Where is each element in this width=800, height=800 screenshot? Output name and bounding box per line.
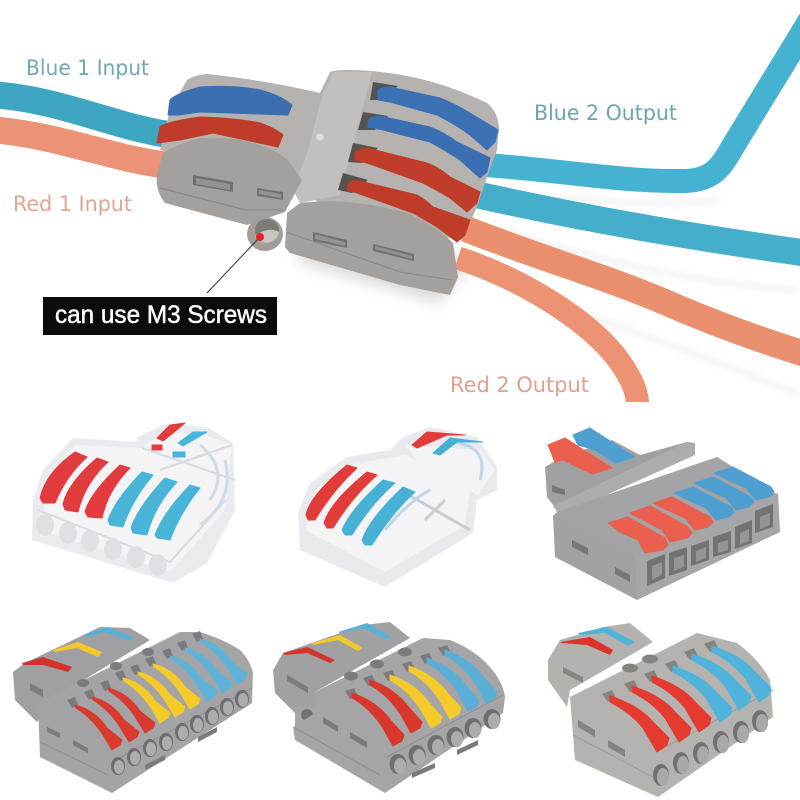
levers red <box>40 423 185 518</box>
label: Red 2 Output: Red 2 Output <box>450 373 589 397</box>
label: Blue 1 Input: Blue 1 Input <box>26 56 149 80</box>
windows and top holes <box>578 654 658 757</box>
back block <box>548 623 653 707</box>
wire: blue 2 output lower <box>478 195 800 253</box>
left block <box>157 138 302 225</box>
connector 2: clear 2-to-4 <box>298 427 497 587</box>
wire: red 1 input <box>0 130 165 165</box>
levers red <box>352 680 422 746</box>
callout pointer line and red dot <box>207 233 264 293</box>
lever: blue right upper <box>378 87 498 150</box>
levers blue <box>342 438 483 545</box>
lever: blue left <box>168 86 292 115</box>
callout: can use M3 Screws: can use M3 Screws <box>55 301 267 329</box>
levers blue <box>108 432 207 540</box>
sockets <box>647 504 773 586</box>
connector 6: light grey six-way with red and blue levers <box>548 623 773 797</box>
holes <box>653 710 768 786</box>
levers blue <box>573 428 774 520</box>
side windows <box>552 485 630 582</box>
holes <box>390 709 500 774</box>
connector 5: grey six-way with red, yellow, blue levers <box>273 622 505 793</box>
label: Red 1 Input: Red 1 Input <box>13 192 132 216</box>
left face <box>553 515 637 600</box>
panel: wired connector photo <box>0 12 800 410</box>
wire: blue 2 output upper <box>485 12 800 181</box>
levers red <box>548 438 713 553</box>
levers yellow <box>390 666 461 728</box>
lever slots <box>67 631 203 708</box>
callout: can use M3 Screws <box>43 297 277 335</box>
centre spine <box>293 72 372 203</box>
screw ear <box>247 217 283 251</box>
back levers <box>560 637 613 655</box>
label: Blue 2 Output: Blue 2 Output <box>534 101 677 125</box>
connector 1: clear 2-to-6 <box>32 423 235 583</box>
back levers <box>283 647 335 663</box>
levers red <box>75 688 155 750</box>
holes <box>111 690 249 775</box>
windows and top holes <box>47 648 217 770</box>
front block <box>293 638 505 793</box>
connector: grey body with levers <box>157 70 499 295</box>
wire: red 2 output upper <box>466 229 800 354</box>
windows and top holes <box>323 648 478 778</box>
screw ear <box>295 707 315 727</box>
lever: blue right lower <box>368 116 490 178</box>
levers red <box>306 432 465 528</box>
wire: blue 1 input <box>0 95 165 134</box>
connector 4: grey nine-way with red, yellow, blue levers <box>13 627 253 793</box>
levers blue <box>427 650 497 711</box>
back block <box>273 622 410 713</box>
front block <box>570 633 773 797</box>
lever: red right upper <box>355 148 480 212</box>
lever: red left <box>157 117 283 147</box>
front block <box>38 632 253 793</box>
levers blue <box>170 639 247 701</box>
connector 3: grey side-lever 2-to-6 <box>545 428 780 600</box>
right block <box>285 201 458 295</box>
levers yellow <box>123 664 200 723</box>
back levers <box>22 657 72 672</box>
lever slots <box>345 645 451 699</box>
back plate <box>545 440 695 510</box>
back block <box>13 627 150 722</box>
lever slots <box>338 82 398 193</box>
top plate <box>160 70 499 240</box>
lever slots <box>602 640 718 702</box>
lever: red right lower <box>347 180 470 242</box>
front face <box>635 493 780 600</box>
levers red <box>610 676 711 752</box>
wire: red 2 output lower <box>458 258 638 410</box>
slot windows <box>193 175 233 192</box>
levers blue <box>673 646 771 722</box>
top surface <box>553 457 778 558</box>
